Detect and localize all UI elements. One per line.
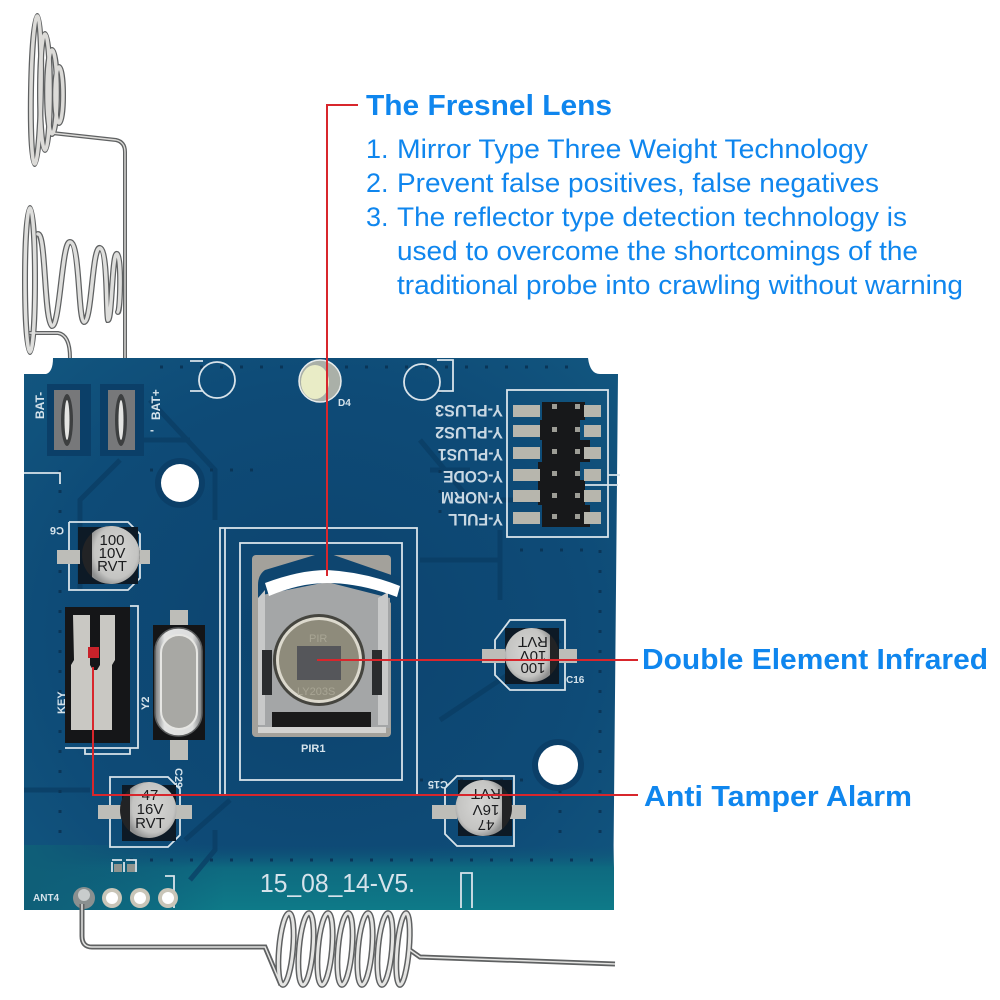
silkscreen labels: D4 [338,398,351,409]
PIR sensor assembly: LY203S [297,686,335,698]
silkscreen labels: - [150,423,154,437]
capacitor C6: RVT [97,558,127,575]
capacitor C6: 100 [99,532,125,549]
LED [299,360,341,402]
capacitor C16: 100 [520,659,546,676]
heading: the fresnel lens: The Fresnel Lens [366,90,612,122]
leader line: anti tamper alarm [93,667,638,795]
mounting hole: upper left [155,458,205,508]
leader line: double element infrared [317,659,638,661]
capacitor C16 [482,628,577,684]
silkscreen labels: Y-PLUS2 [435,423,503,442]
silkscreen labels: KEY [56,691,68,714]
capacitor C6 [57,526,150,584]
silkscreen labels [33,389,585,904]
pin header [513,402,601,527]
top battery spring and wire [30,16,125,358]
terminal pads and small components [73,864,178,909]
text block: fresnel lens list [366,134,963,300]
mounting hole: lower right [532,739,584,791]
capacitor C29: 16V [137,801,163,818]
silkscreen labels: C16 [566,675,585,686]
silkscreen labels: Y-NORM [441,488,503,507]
capacitor C15: 47 [478,816,494,833]
capacitor C16: RVT [518,633,548,650]
capacitor C15: 16V [473,801,499,818]
vias [60,367,600,860]
PIR sensor assembly: PIR [309,633,327,645]
capacitor C15 [432,780,526,836]
silkscreen labels: Y-PLUS3 [435,401,503,420]
silkscreen labels: ANT4 [33,893,60,904]
circuit board [24,358,620,910]
silkscreen labels: Y-CODE [443,467,503,486]
silkscreen labels: PIR1 [301,743,325,755]
silkscreen labels: 15_08_14-V5. [260,868,415,898]
tamper switch [65,607,130,743]
silkscreen labels: Y2 [140,697,152,710]
silkscreen labels: Y-PLUS1 [438,445,503,464]
text block: fresnel lens list: The reflector type detection technology is [397,202,907,232]
silkscreen outlines [24,360,620,908]
traces [24,400,560,880]
silkscreen labels: C6 [50,524,64,536]
text block: fresnel lens list: 1. [366,134,389,164]
text block: fresnel lens list: 2. [366,168,389,198]
leader line: Fresnel lens [327,105,358,576]
PIR sensor assembly [252,552,400,737]
capacitor C29: RVT [135,815,165,832]
silkscreen labels: BAT+ [149,389,163,420]
antenna coil [82,904,615,985]
capacitor C16: 10V [520,647,546,664]
label: double element infrared: Double Element Infrared [642,644,988,676]
battery pads with solder [47,384,144,456]
lower battery spring and hook [25,208,120,358]
text block: fresnel lens list: used to overcome the shortcomings of the [397,236,918,266]
silkscreen labels: C29 [172,768,184,788]
silkscreen labels: BAT- [33,392,47,419]
text block: fresnel lens list: Mirror Type Three Weight Technology [397,134,869,164]
text block: fresnel lens list: traditional probe into crawling without warning [397,270,963,300]
silkscreen labels: Y-FULL [448,510,503,529]
capacitor C6: 10V [99,545,125,562]
capacitor C29: 47 [142,787,158,804]
crystal Y2 [153,610,205,760]
label: anti tamper alarm: Anti Tamper Alarm [644,781,912,813]
silkscreen labels: C15 [428,778,448,790]
capacitor C15: RVT [471,785,501,802]
text block: fresnel lens list: 3. [366,202,389,232]
text block: fresnel lens list: Prevent false positives, false negatives [397,168,879,198]
capacitor C29 [98,782,192,841]
